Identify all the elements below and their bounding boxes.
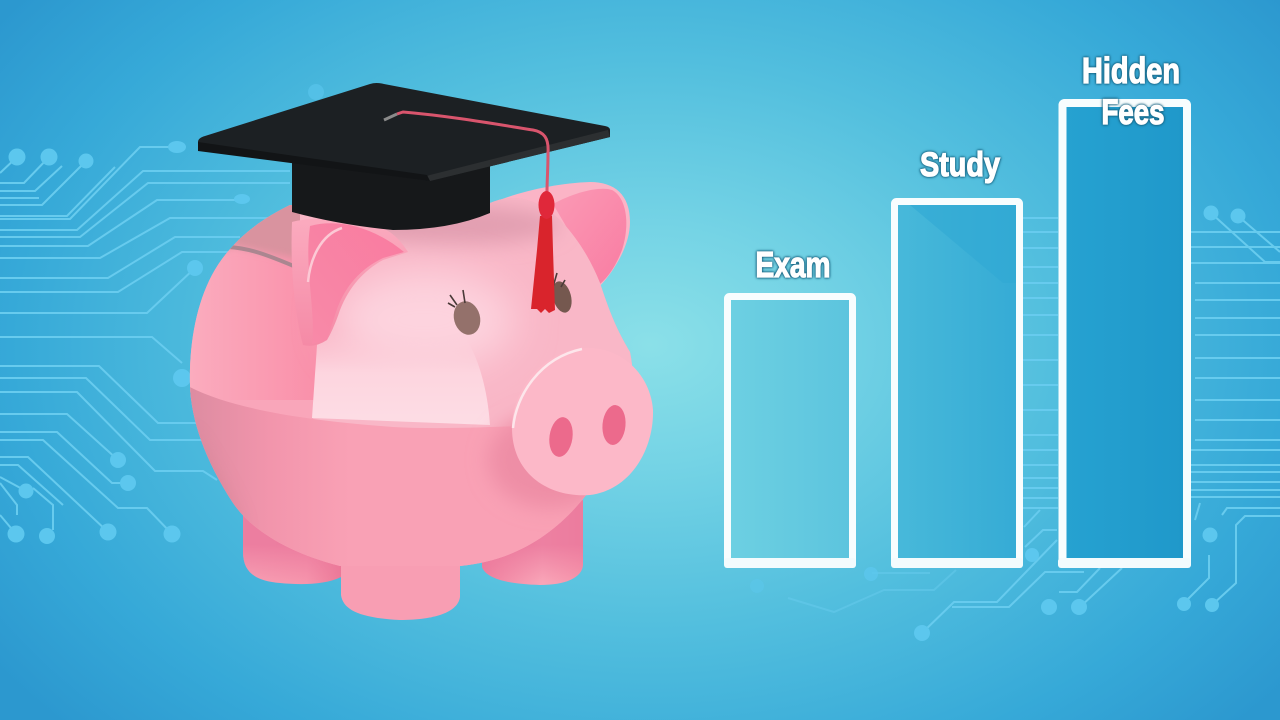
- left ear: [292, 218, 408, 346]
- cord: [397, 112, 548, 192]
- upper left shading: [190, 205, 317, 400]
- bar: Hidden Fees: Fees: [1102, 93, 1164, 132]
- circuit pattern: right: [750, 206, 1280, 641]
- eyes: [448, 273, 575, 338]
- legs: [243, 500, 583, 620]
- right ear: [497, 182, 630, 286]
- belly: [190, 387, 586, 566]
- tassel: [531, 216, 555, 313]
- belly left shading: [185, 430, 240, 530]
- piggy bank: [180, 180, 660, 620]
- graduation cap: [198, 83, 610, 313]
- bar: Hidden Fees: Hidden: [1082, 50, 1180, 91]
- nostrils: [547, 404, 627, 458]
- snout: [512, 348, 653, 495]
- bar: Exam: Exam: [756, 244, 830, 285]
- light panel: [312, 344, 490, 425]
- cap base: [292, 160, 490, 230]
- bar: Study: [891, 146, 1023, 568]
- bar: Exam: [724, 244, 856, 568]
- snout shadow: [488, 414, 586, 510]
- bar: Study: Study: [920, 146, 1000, 184]
- body: [190, 198, 632, 566]
- bar: Hidden Fees: [1058, 50, 1191, 568]
- head area: [300, 198, 632, 428]
- bar chart: [724, 50, 1191, 568]
- cap board: [198, 83, 610, 181]
- circuit pattern: left: [0, 84, 324, 544]
